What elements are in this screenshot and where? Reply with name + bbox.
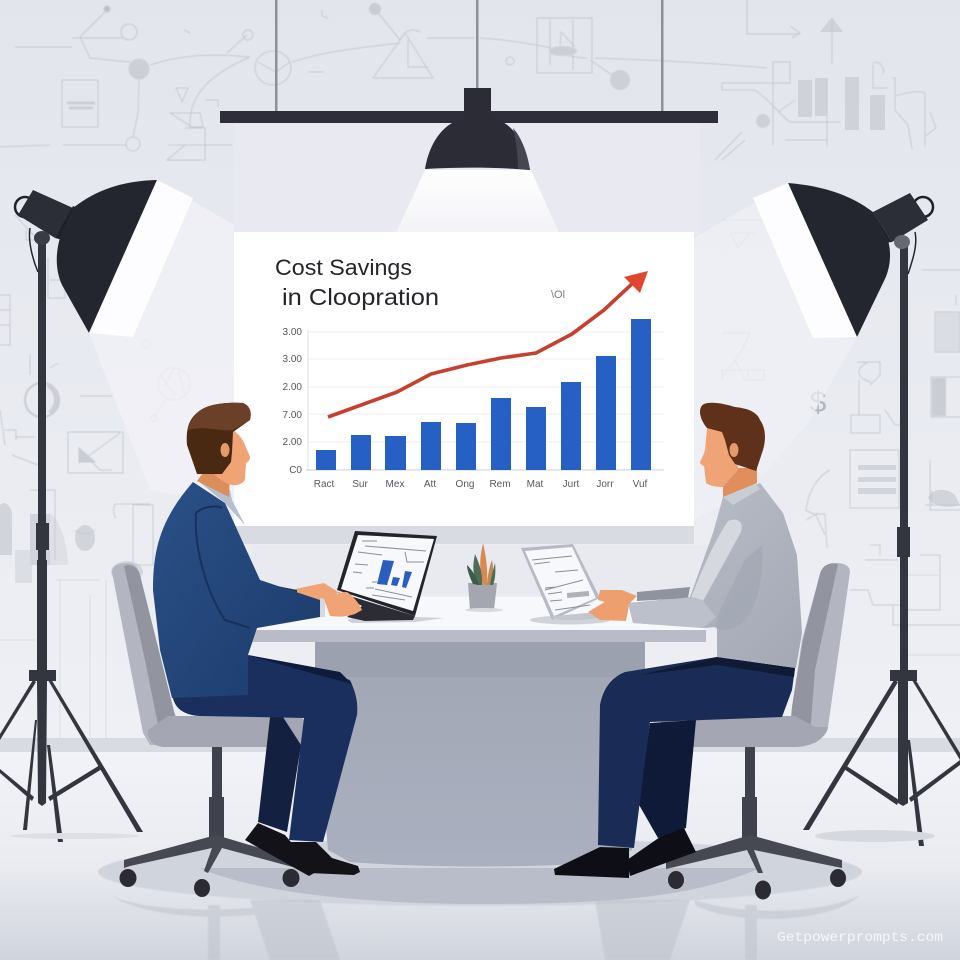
- back sleeve: [262, 583, 297, 600]
- light beam: ceiling lamp: [395, 170, 560, 235]
- jacket: [153, 482, 320, 698]
- x axis labels: Rem: [489, 479, 511, 490]
- casters: [120, 869, 300, 897]
- y axis labels: 2.00: [283, 382, 302, 393]
- table edge: [252, 630, 706, 642]
- floor: [0, 752, 960, 960]
- collar: [723, 483, 760, 505]
- backdrop panel behind chart: [234, 123, 700, 235]
- table wall shadow: [252, 545, 722, 595]
- x axis labels: Jorr: [596, 479, 614, 490]
- wall background: [0, 0, 960, 752]
- left stand floor shadow: [10, 833, 140, 839]
- chair base: [124, 835, 300, 873]
- left column doodles: [0, 295, 58, 375]
- wall base band: [0, 738, 960, 752]
- shirt cuff: [320, 598, 325, 617]
- lower wall panelling: [0, 575, 960, 738]
- x axis labels: Ract: [314, 479, 335, 490]
- front sleeve: [628, 597, 716, 628]
- heading: Cost Savings: [275, 255, 412, 280]
- shadow under chart panel: [234, 526, 694, 544]
- x axis labels: Vuf: [633, 479, 648, 490]
- hair: [187, 403, 251, 474]
- left softbox light: [15, 180, 193, 337]
- laptop base: [337, 592, 415, 621]
- softbox dome: [57, 180, 157, 333]
- chair back: [790, 563, 850, 745]
- neck and collar: [197, 480, 245, 525]
- table top: [252, 597, 706, 630]
- small chart note: \Ol: [551, 289, 565, 301]
- bars: [316, 319, 651, 470]
- chair seat: [660, 716, 828, 747]
- softbox diffuser: [89, 180, 193, 337]
- left laptop: [337, 531, 445, 623]
- back hand: [295, 583, 338, 604]
- ceiling light bar: [220, 111, 718, 123]
- heading: in Cloopration: [282, 284, 439, 310]
- back leg: [638, 720, 696, 838]
- chair back: [112, 563, 190, 745]
- chair column: [745, 747, 755, 799]
- right man: [554, 403, 802, 878]
- x axis labels: Jurt: [563, 479, 580, 490]
- x axis labels: Ong: [456, 479, 474, 490]
- x axis labels: Sur: [352, 479, 368, 490]
- left light stand: [0, 240, 143, 842]
- y axis labels: 7.00: [283, 410, 302, 421]
- hands: [588, 590, 637, 621]
- y axis labels: [283, 327, 302, 476]
- hair: [700, 403, 765, 471]
- face: [700, 428, 738, 487]
- grid and axes: [306, 330, 664, 470]
- heading: [275, 255, 439, 310]
- laptop screen text lines: [353, 541, 426, 600]
- y axis labels: C0: [289, 465, 302, 476]
- table: [252, 543, 706, 866]
- neck: [723, 468, 757, 497]
- right column doodles: [722, 220, 775, 255]
- chair seat: [148, 716, 305, 747]
- softbox dome: [788, 183, 890, 337]
- text on wall: dollar doodle: $: [810, 386, 827, 419]
- plant shadow: [465, 608, 503, 612]
- x axis labels: Mex: [386, 479, 404, 490]
- chair column: [212, 747, 222, 799]
- floor shadow under table: [98, 838, 862, 906]
- right softbox light: [753, 183, 933, 338]
- laptop screen chart: [377, 560, 412, 588]
- face: [212, 428, 250, 485]
- shoes: [245, 823, 360, 876]
- light beam: left softbox: [89, 180, 234, 505]
- right light stand: [803, 245, 960, 846]
- shirt: [628, 483, 802, 668]
- floor reflections: [110, 895, 860, 960]
- laptop screen text lines: [532, 556, 590, 610]
- watermark: Getpowerprompts.com: [777, 930, 943, 946]
- light beam: right softbox: [694, 183, 857, 520]
- back sleeve: [637, 587, 690, 601]
- upper arm highlight: [690, 520, 742, 603]
- x axis labels: Mat: [527, 479, 544, 490]
- y axis labels: 3.00: [283, 354, 302, 365]
- y axis labels: 3.00: [283, 327, 302, 338]
- ceiling rods: [275, 0, 664, 112]
- x axis labels: [314, 479, 648, 490]
- thigh and front leg: [172, 655, 357, 842]
- right chair: [660, 563, 850, 900]
- y axis labels: 2.00: [283, 437, 302, 448]
- casters: [668, 869, 846, 900]
- left chair: [112, 563, 305, 897]
- ceiling lamp: [425, 88, 530, 170]
- softbox head: [15, 190, 82, 272]
- thigh and front leg: [598, 657, 795, 848]
- front hand: [324, 592, 362, 617]
- softbox diffuser: [753, 183, 857, 338]
- wall sketch fills: [0, 17, 960, 583]
- plant: [467, 543, 497, 610]
- ear: [220, 443, 230, 457]
- red trend line with arrow: [328, 271, 648, 417]
- table pedestal: [315, 640, 645, 866]
- softbox head: [866, 193, 933, 274]
- wall sketches: technical doodles: [0, 0, 960, 625]
- right laptop: [521, 544, 610, 624]
- x axis labels: Att: [424, 479, 436, 490]
- shoes: [554, 828, 696, 878]
- ear: [730, 443, 738, 457]
- left man: [153, 403, 362, 876]
- panel: cost savings chart: [234, 232, 694, 526]
- chair base: [666, 835, 842, 873]
- back leg: [258, 700, 301, 832]
